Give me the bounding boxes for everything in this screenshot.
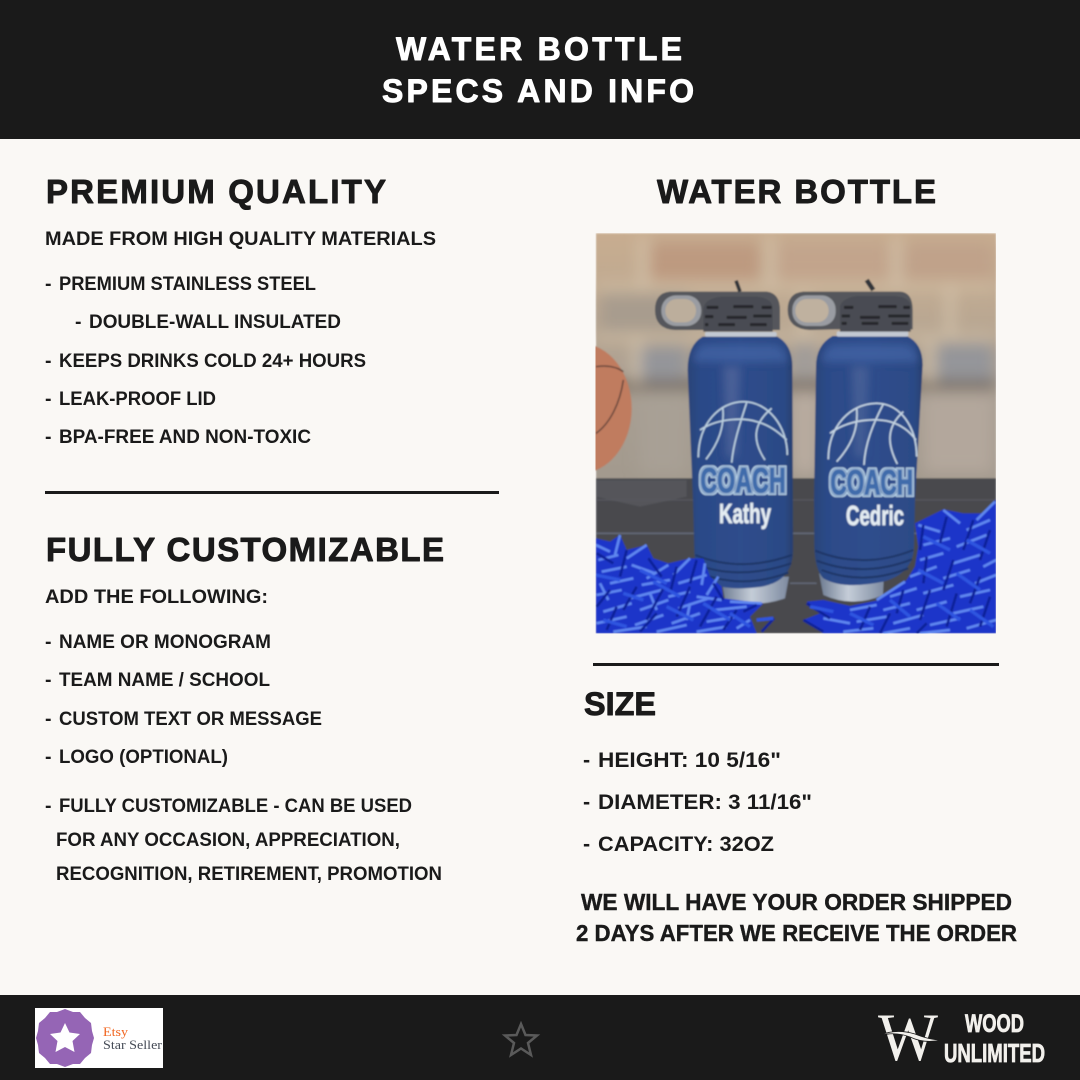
logo: Wood Unlimited — [878, 999, 1045, 1075]
size list: CAPACITY: 32OZ — [598, 832, 774, 856]
feature list: - — [45, 273, 52, 295]
shipping note: WE WILL HAVE YOUR ORDER SHIPPED — [581, 889, 1012, 915]
title: SPECS AND INFO — [382, 73, 694, 109]
handle — [788, 292, 913, 330]
badge: Etsy Star Seller — [35, 1008, 163, 1068]
feature list: - — [75, 311, 82, 333]
blue shredded paper: left pile — [596, 535, 774, 633]
panel: size — [583, 686, 812, 856]
wall — [596, 233, 996, 480]
tabletop — [596, 478, 996, 633]
header band — [0, 0, 1080, 139]
label: Star Seller: Star Seller — [103, 1038, 163, 1052]
bottle: Kathy — [655, 281, 793, 604]
heading: premium quality: PREMIUM QUALITY — [46, 173, 386, 210]
feature list: BPA-FREE AND NON-TOXIC — [59, 426, 311, 448]
wordmark — [944, 1010, 1045, 1068]
heading: fully customizable: FULLY CUSTOMIZABLE — [46, 531, 444, 568]
subheading: materials: MADE FROM HIGH QUALITY MATERIALS — [45, 228, 436, 250]
body — [814, 336, 923, 585]
customization list: NAME OR MONOGRAM — [59, 631, 271, 653]
customization list: - — [45, 708, 52, 730]
occasions text block: FOR ANY OCCASION, APPRECIATION, — [56, 829, 400, 851]
lid — [703, 297, 773, 332]
subheading: add the following: ADD THE FOLLOWING: — [45, 586, 268, 608]
size list: - — [583, 790, 590, 814]
bottle: Cedric — [788, 280, 923, 602]
customization list: - — [45, 669, 52, 691]
body — [688, 337, 793, 588]
steel neck — [705, 332, 777, 337]
size list: - — [583, 832, 590, 856]
steel neck — [837, 331, 908, 337]
customization list: - — [45, 746, 52, 768]
feature list: KEEPS DRINKS COLD 24+ HOURS — [59, 350, 366, 372]
feature list — [45, 273, 366, 448]
icon: star outline — [505, 1024, 537, 1055]
occasions text block: FULLY CUSTOMIZABLE - CAN BE USED — [59, 795, 412, 817]
icon: purple seal with star — [36, 1009, 94, 1067]
heading: size: SIZE — [584, 686, 656, 722]
title: WATER BOTTLE — [396, 31, 682, 67]
customization list: CUSTOM TEXT OR MESSAGE — [59, 708, 322, 730]
blue shredded paper: right pile — [803, 499, 996, 633]
handle — [655, 292, 780, 330]
wordmark: WOOD — [965, 1010, 1024, 1038]
customization list: LOGO (OPTIONAL) — [59, 746, 228, 768]
customization list: - — [45, 631, 52, 653]
lid — [840, 296, 911, 332]
feature list: PREMIUM STAINLESS STEEL — [59, 273, 316, 295]
size list: - — [583, 748, 590, 772]
feature list: - — [45, 426, 52, 448]
engraved basketball — [828, 403, 917, 465]
occasions text block — [45, 795, 442, 885]
title — [382, 31, 694, 109]
shipping note — [576, 889, 1017, 946]
occasions text block: RECOGNITION, RETIREMENT, PROMOTION — [56, 863, 442, 885]
feature list: - — [45, 350, 52, 372]
basketball — [528, 343, 632, 473]
footer band — [0, 995, 1080, 1080]
heading: water bottle: WATER BOTTLE — [657, 173, 936, 210]
shoulder and reflection — [822, 345, 918, 457]
label: Etsy: Etsy — [103, 1024, 129, 1039]
panel: fully customizable — [45, 531, 444, 885]
size list — [583, 748, 812, 856]
logo mark: W with swoosh: W — [878, 999, 939, 1075]
engraved COACH: COACH — [700, 462, 786, 501]
customization list — [45, 631, 322, 768]
steel base — [721, 577, 789, 604]
straw — [867, 280, 873, 290]
engraved basketball — [698, 402, 787, 463]
customization list: TEAM NAME / SCHOOL — [59, 669, 270, 691]
steel base — [819, 573, 884, 602]
engraved COACH: COACH — [830, 464, 913, 503]
feature list: - — [45, 388, 52, 410]
product photo: two engraved bottles — [596, 233, 996, 634]
panel: premium quality — [45, 173, 436, 448]
size list: DIAMETER: 3 11/16" — [598, 790, 812, 814]
shipping note: 2 DAYS AFTER WE RECEIVE THE ORDER — [576, 920, 1017, 946]
feature list: LEAK-PROOF LID — [59, 388, 216, 410]
feature list: DOUBLE-WALL INSULATED — [89, 311, 341, 333]
engraved name: Kathy: Kathy — [719, 498, 771, 529]
shoulder and reflection — [693, 345, 787, 457]
engraved name: Cedric: Cedric — [846, 500, 904, 531]
size list: HEIGHT: 10 5/16" — [598, 748, 781, 772]
straw — [736, 281, 740, 292]
occasions text block: - — [45, 795, 52, 817]
